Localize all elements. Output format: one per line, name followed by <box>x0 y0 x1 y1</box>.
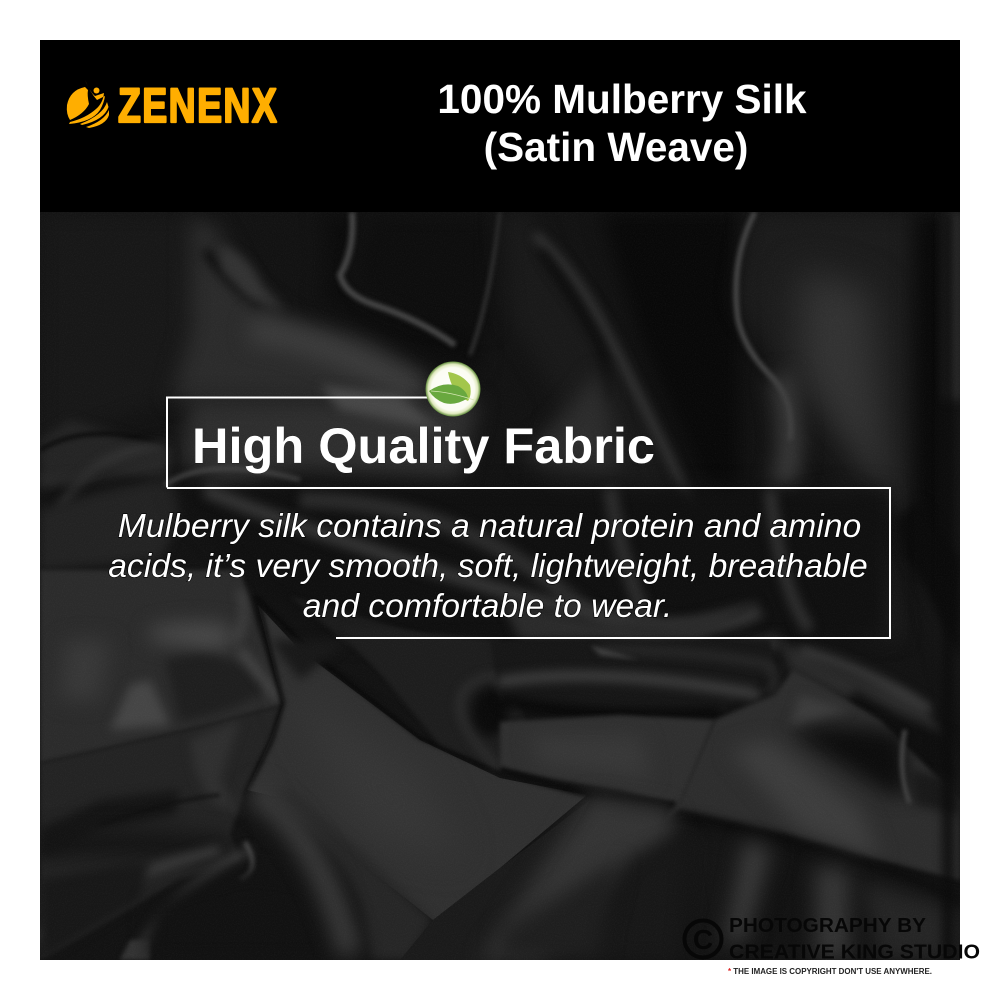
title: (Satin Weave) <box>484 124 748 170</box>
silk fabric photograph <box>40 212 960 960</box>
triangular fold <box>673 672 960 880</box>
heading: High Quality Fabric <box>192 417 655 474</box>
lower right streaks <box>480 212 960 960</box>
callout frame <box>167 398 890 638</box>
photography credit: PHOTOGRAPHY BY <box>729 914 926 937</box>
icon: logo emblem <box>67 80 109 128</box>
icon: copyright symbol: C <box>693 924 713 955</box>
title: 100% Mulberry Silk <box>437 76 807 122</box>
icon: green leaves badge <box>426 362 480 416</box>
top right folds <box>528 212 960 560</box>
icon: copyright symbol <box>684 920 722 958</box>
copyright notice: * THE IMAGE IS COPYRIGHT DON'T USE ANYWHERE. <box>728 967 932 976</box>
title <box>437 76 807 170</box>
description text <box>108 507 868 625</box>
middle band behind text <box>170 488 890 652</box>
fabric grain <box>40 212 960 960</box>
photography credit: CREATIVE KING STUDIO <box>729 940 980 964</box>
logo wordmark: ZENENX <box>118 80 278 133</box>
grey flat panel <box>245 596 590 960</box>
watermark <box>684 914 980 976</box>
description text: acids, it’s very smooth, soft, lightweight, breathable <box>108 547 868 585</box>
upper dark fold over panel <box>300 601 520 771</box>
logo <box>67 80 278 133</box>
top left folds <box>40 212 500 570</box>
photography credit <box>729 914 980 964</box>
description text: Mulberry silk contains a natural protein and amino <box>118 507 861 545</box>
bottom left folds <box>40 569 281 960</box>
centre band and right fold <box>498 640 936 803</box>
description text: and comfortable to wear. <box>303 587 672 625</box>
